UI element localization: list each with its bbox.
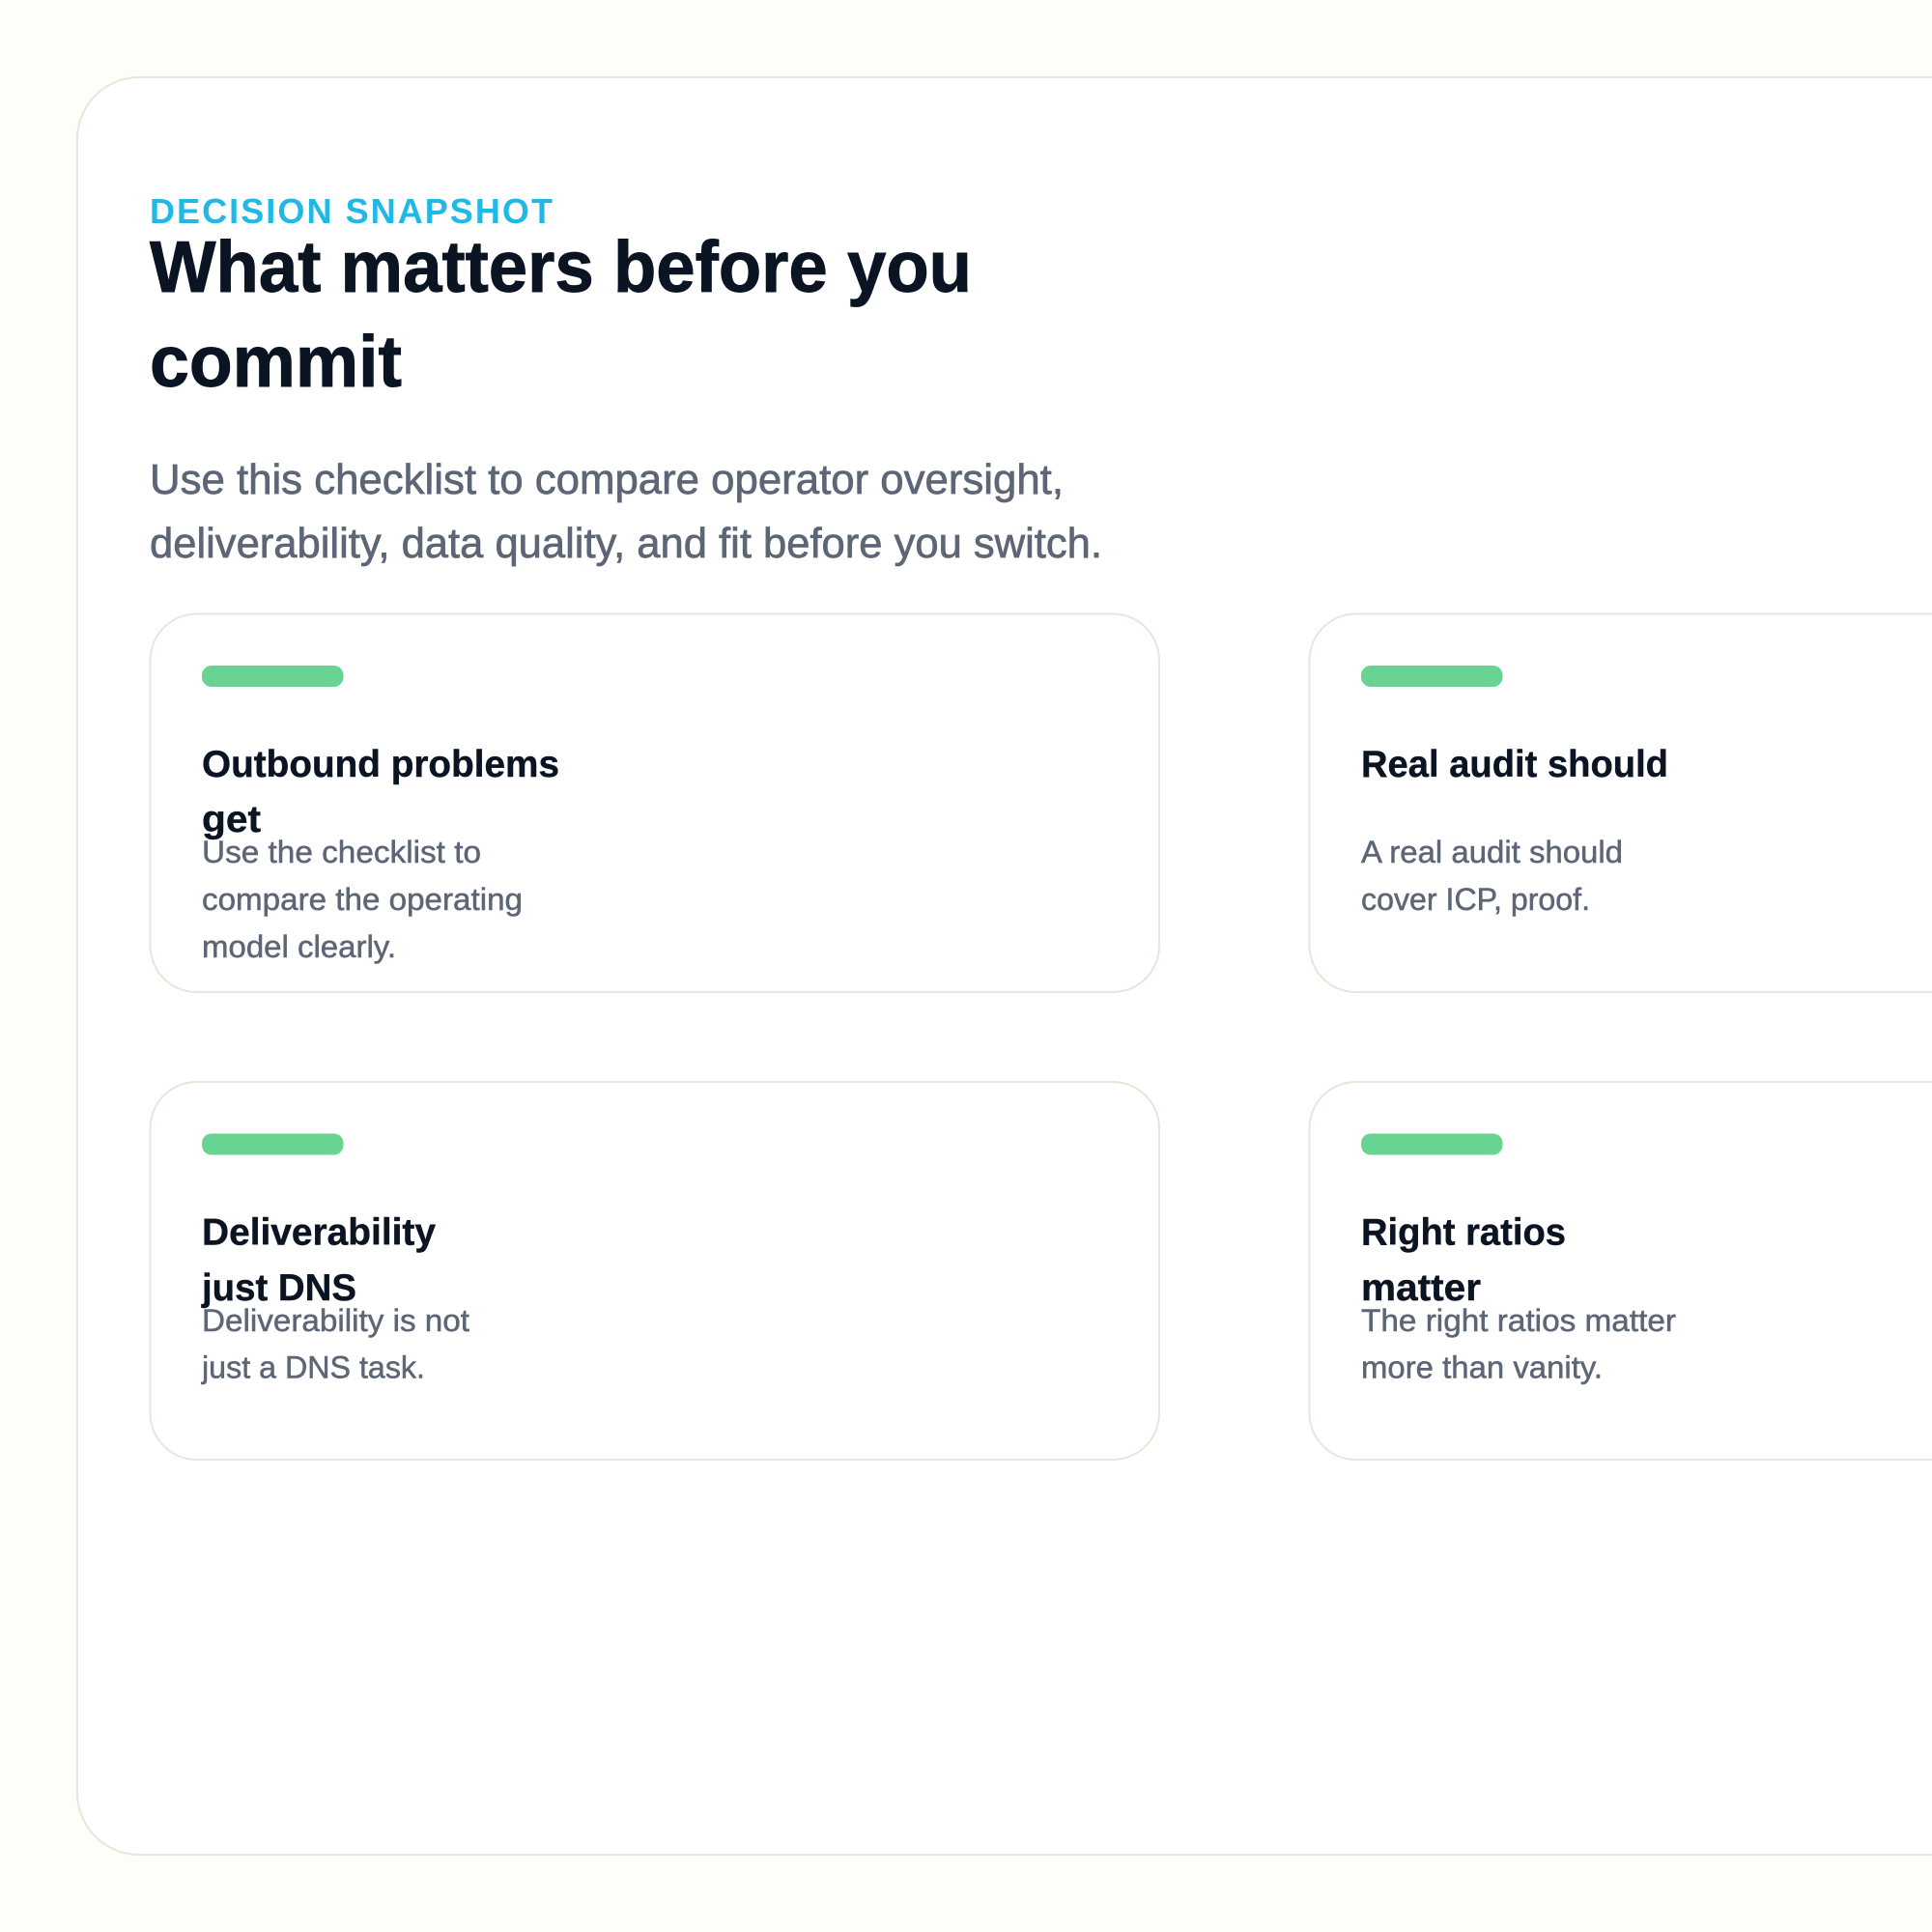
eyebrow label: DECISION SNAPSHOT [150, 191, 553, 231]
card body text: compare the operating [202, 882, 523, 917]
card heading: Deliverability [202, 1211, 436, 1254]
green accent bar [202, 666, 344, 687]
card heading: just DNS [201, 1267, 356, 1309]
green accent bar [202, 1134, 344, 1155]
card body text [201, 1303, 469, 1385]
card body text: Deliverability is not [202, 1303, 469, 1338]
panel: card right ratios [1310, 1082, 1932, 1460]
card body text: A real audit should [1361, 835, 1623, 869]
card body text: Use the checklist to [202, 835, 481, 869]
panel: card deliverability [151, 1082, 1159, 1460]
card body text: cover ICP, proof. [1361, 882, 1590, 917]
card heading: matter [1361, 1267, 1481, 1309]
card body text: model clearly. [202, 929, 396, 964]
card heading: Outbound problems [202, 744, 559, 785]
card body text [202, 835, 523, 964]
title: What matters before you [150, 226, 972, 307]
panel: card real audit [1310, 614, 1932, 992]
title: commit [150, 321, 402, 402]
card heading: Real audit should [1361, 744, 1668, 785]
card heading: Right ratios [1361, 1211, 1566, 1254]
card body text: The right ratios matter [1361, 1303, 1676, 1338]
panel: card outbound problems [151, 614, 1159, 992]
intro text: deliverability, data quality, and fit before you switch. [150, 520, 1102, 567]
title [150, 226, 972, 402]
intro text [150, 456, 1102, 567]
green accent bar [1361, 1134, 1503, 1155]
card heading [202, 744, 559, 840]
green accent bar [1361, 666, 1503, 687]
card body text: more than vanity. [1361, 1350, 1603, 1385]
card heading [1361, 1211, 1566, 1309]
card body text [1361, 835, 1623, 917]
card body text: just a DNS task. [201, 1350, 425, 1385]
card heading: get [202, 799, 261, 840]
card heading [201, 1211, 436, 1309]
intro text: Use this checklist to compare operator oversight, [150, 456, 1064, 503]
card body text [1361, 1303, 1676, 1385]
